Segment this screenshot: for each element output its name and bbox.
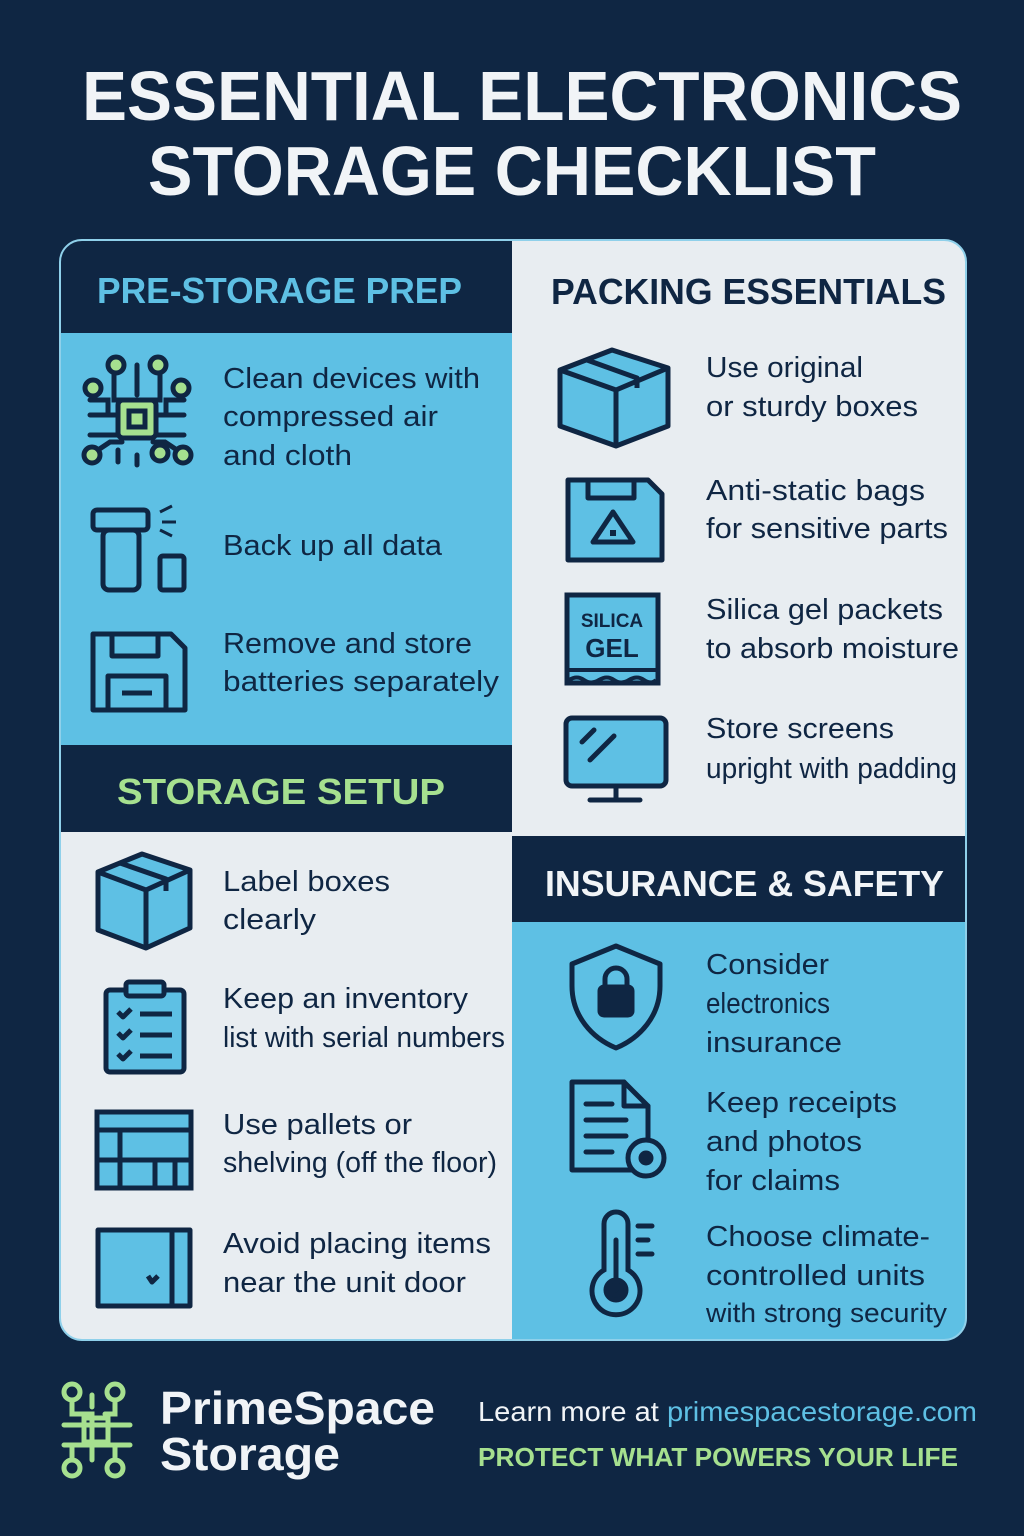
text: clean devices: and cloth bbox=[223, 440, 352, 472]
icon: anti-static bag bbox=[568, 480, 662, 560]
text: silica: to absorb moisture bbox=[706, 633, 959, 665]
panel: packing essentials bbox=[551, 271, 959, 800]
title bbox=[82, 57, 962, 210]
text: original boxes: Use original bbox=[706, 352, 863, 384]
icon: silica gel bbox=[567, 595, 658, 683]
text: clean devices bbox=[223, 363, 480, 472]
text: remove batteries: batteries separately bbox=[223, 666, 500, 698]
text: label boxes bbox=[223, 866, 390, 936]
text: inventory: list with serial numbers bbox=[223, 1022, 505, 1054]
text: receipts bbox=[706, 1087, 897, 1197]
icon: thermometer bbox=[592, 1212, 652, 1315]
footer brand name bbox=[160, 1382, 435, 1480]
text: pallets: shelving (off the floor) bbox=[223, 1147, 497, 1179]
text: back up: Back up all data bbox=[223, 530, 443, 562]
icon: circuit chip bbox=[84, 357, 191, 465]
icon: document bbox=[572, 1082, 664, 1176]
icon: shield lock bbox=[572, 946, 660, 1048]
text: climate bbox=[705, 1221, 948, 1328]
title: ESSENTIAL ELECTRONICS bbox=[82, 57, 962, 135]
footer link: Learn more at primespacestorage.com bbox=[478, 1396, 977, 1427]
text: climate: controlled units bbox=[706, 1260, 925, 1292]
text: receipts: and photos bbox=[706, 1126, 862, 1158]
icon: box bbox=[560, 350, 668, 446]
text: insurance bbox=[706, 949, 842, 1059]
text: silica: Silica gel packets bbox=[706, 594, 943, 626]
text: avoid door: Avoid placing items bbox=[223, 1228, 491, 1260]
text: clean devices: Clean devices with bbox=[223, 363, 480, 395]
footer tagline: PROTECT WHAT POWERS YOUR LIFE bbox=[478, 1442, 958, 1472]
footer brand name: Storage bbox=[160, 1428, 340, 1480]
text: anti-static: Anti-static bags bbox=[706, 475, 925, 507]
text: clean devices: compressed air bbox=[223, 401, 438, 433]
text: inventory: Keep an inventory bbox=[223, 983, 469, 1015]
text: screens bbox=[706, 713, 957, 785]
panel: insurance & safety bbox=[545, 863, 948, 1328]
icon: silica gel: SILICA bbox=[581, 611, 643, 632]
text: remove batteries: Remove and store bbox=[223, 628, 472, 660]
panel: pre-storage prep bbox=[84, 270, 500, 710]
text: remove batteries bbox=[223, 628, 500, 698]
text: inventory bbox=[223, 983, 505, 1054]
icon: clipboard bbox=[106, 982, 184, 1072]
text: silica bbox=[706, 594, 959, 665]
text: climate: Choose climate- bbox=[706, 1221, 930, 1253]
text: climate: with strong security bbox=[705, 1298, 948, 1328]
text: anti-static bbox=[706, 475, 948, 545]
icon: spray backup bbox=[93, 506, 184, 590]
icon: floppy battery bbox=[93, 634, 185, 710]
text: avoid door: near the unit door bbox=[223, 1267, 466, 1299]
heading: pre-storage prep: PRE-STORAGE PREP bbox=[97, 270, 462, 311]
icon: silica gel: GEL bbox=[585, 633, 639, 663]
footer brand name: PrimeSpace bbox=[160, 1382, 435, 1434]
text: insurance: insurance bbox=[706, 1027, 842, 1059]
title: STORAGE CHECKLIST bbox=[148, 132, 876, 210]
text: original boxes bbox=[706, 352, 918, 423]
text: pallets: Use pallets or bbox=[223, 1109, 412, 1141]
text: receipts: for claims bbox=[706, 1165, 840, 1197]
icon: door bbox=[98, 1230, 190, 1306]
text: label boxes: clearly bbox=[223, 904, 317, 936]
heading: packing essentials: PACKING ESSENTIALS bbox=[551, 271, 946, 312]
text: screens: upright with padding bbox=[706, 753, 957, 785]
heading: insurance & safety: INSURANCE & SAFETY bbox=[545, 863, 944, 904]
panel: storage setup bbox=[97, 771, 505, 1306]
text: original boxes: or sturdy boxes bbox=[706, 391, 918, 423]
footer logo icon bbox=[64, 1384, 130, 1476]
main card bbox=[60, 240, 966, 1340]
text: receipts: Keep receipts bbox=[706, 1087, 897, 1119]
text: label boxes: Label boxes bbox=[223, 866, 390, 898]
text: insurance: electronics bbox=[706, 988, 830, 1020]
heading: storage setup: STORAGE SETUP bbox=[117, 771, 445, 812]
text: anti-static: for sensitive parts bbox=[706, 513, 948, 545]
text: insurance: Consider bbox=[706, 949, 829, 981]
icon: box bbox=[98, 854, 190, 948]
text: screens: Store screens bbox=[706, 713, 894, 745]
text: avoid door bbox=[223, 1228, 491, 1299]
text: pallets bbox=[223, 1109, 497, 1179]
icon: monitor bbox=[566, 718, 666, 800]
icon: shelving bbox=[97, 1112, 191, 1188]
